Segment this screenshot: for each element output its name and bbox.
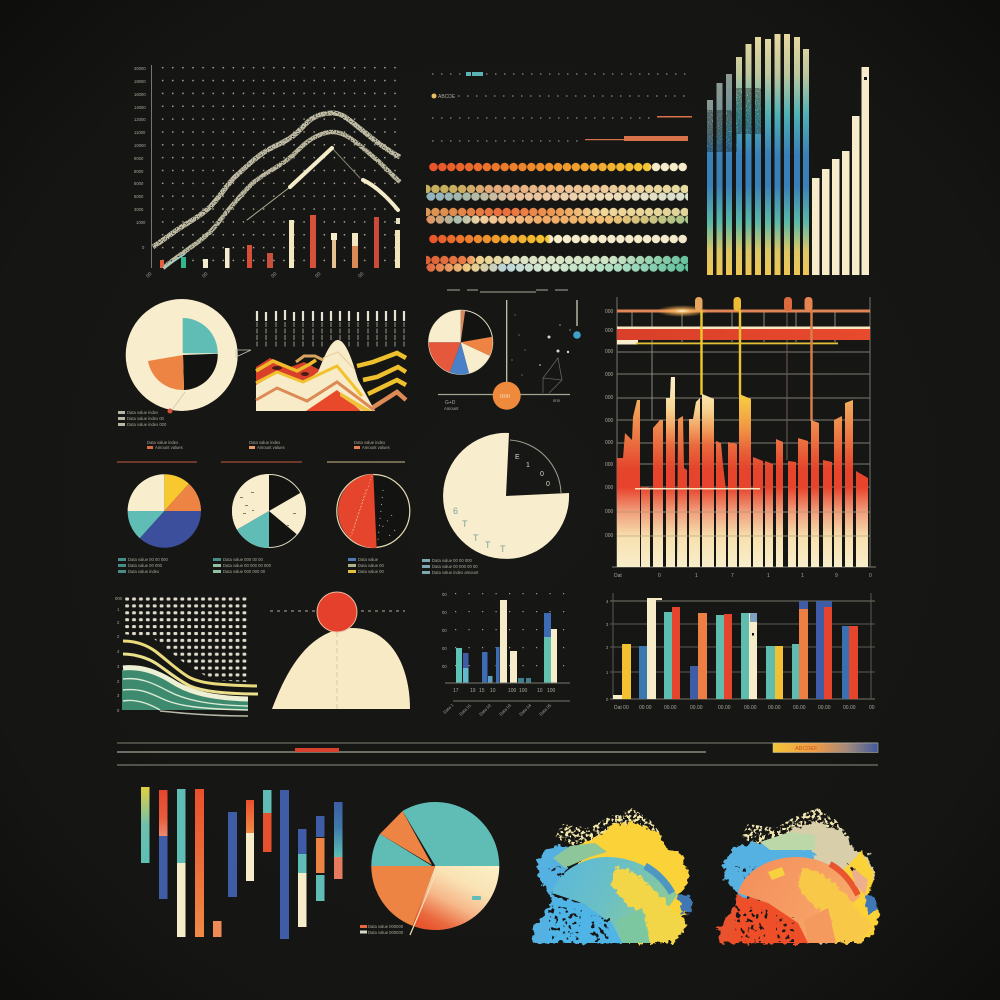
callout lines — [172, 350, 251, 410]
header rules — [117, 461, 405, 463]
x labels — [614, 705, 875, 711]
y labels: 2 — [117, 634, 120, 639]
axis captions: Amount — [444, 406, 459, 411]
y axis with labels — [134, 65, 152, 268]
y labels: 000 — [605, 349, 614, 355]
rim labels: T — [500, 544, 506, 554]
dot grid — [158, 63, 403, 268]
y labels: 4 — [606, 599, 609, 604]
legend 2: Data value 000 00 00 — [223, 557, 263, 562]
header legend 1: Amount values — [155, 445, 183, 450]
rim labels — [453, 506, 506, 554]
value labels: 100 — [519, 688, 528, 694]
yellow right edge — [830, 850, 880, 943]
value labels: 100 — [547, 688, 556, 694]
x axis labels: 00 — [145, 271, 154, 279]
notch labels: 0 — [540, 471, 544, 478]
rim labels: T — [462, 519, 468, 529]
tan silhouette — [766, 822, 878, 943]
small bars — [160, 215, 400, 268]
legend — [360, 924, 404, 935]
axis captions: G+D — [445, 400, 456, 406]
y labels: 00 — [442, 592, 447, 597]
grid lines — [612, 297, 876, 567]
cream top strip — [123, 668, 248, 699]
panel: small bar chart — [442, 590, 570, 717]
legend: Data value 000000 — [368, 924, 404, 929]
dark speckle — [546, 866, 610, 943]
rotated labels: Data 04 — [518, 702, 533, 717]
cream wave band — [123, 654, 258, 694]
cream dome — [272, 628, 410, 709]
value labels: 17 — [453, 688, 459, 694]
value labels: 100 — [508, 688, 517, 694]
bar 4 — [195, 789, 204, 937]
lever axes — [438, 300, 577, 394]
x labels: 00.00 — [843, 705, 856, 711]
orange slice — [148, 355, 184, 390]
bar 11 — [316, 816, 324, 901]
cream disc — [126, 299, 238, 411]
bright bar tops — [666, 377, 751, 450]
y labels: 000 — [605, 395, 614, 401]
notch labels: 1 — [526, 462, 530, 469]
x labels: 00.00 — [664, 705, 677, 711]
x labels: Dat — [614, 573, 622, 579]
teal tag — [472, 896, 481, 900]
legend — [118, 410, 167, 427]
y labels: 000 — [605, 309, 614, 315]
dark accents — [272, 366, 309, 376]
dot row 4 — [429, 234, 687, 244]
rotated labels: Data 03 — [498, 702, 513, 717]
bottom blue — [545, 900, 622, 943]
red marker — [295, 748, 339, 752]
y axis with labels: 16000 — [134, 92, 146, 97]
value labels — [453, 688, 556, 694]
y labels — [442, 592, 447, 669]
panel: tall gradient bars — [705, 34, 869, 275]
header legend 2 — [249, 440, 285, 450]
bright red lower — [731, 900, 808, 943]
bar 9 — [280, 790, 289, 939]
pie chart — [429, 310, 493, 374]
header legend 3: Amount values — [362, 445, 390, 450]
legend 1: Data value index — [128, 569, 160, 574]
y labels: 00 — [442, 628, 447, 633]
pie 2 — [232, 474, 306, 548]
x labels: 00 — [869, 705, 875, 711]
rotated labels — [442, 702, 553, 717]
y labels: 000 — [605, 462, 614, 468]
teal side slice — [371, 834, 432, 866]
panel: floating bars — [141, 787, 342, 939]
highlight line — [635, 488, 760, 490]
legend 1 — [118, 557, 168, 574]
y axis with labels: 6000 — [134, 181, 144, 186]
y labels: 2 — [606, 645, 609, 650]
y labels: 000 — [605, 328, 614, 334]
legend — [422, 558, 479, 575]
header legend 3 — [354, 440, 390, 450]
x axis labels: 00 — [314, 271, 323, 279]
y axis with labels: 5000 — [134, 194, 144, 199]
dot field — [125, 598, 247, 682]
bar 12 — [334, 802, 342, 879]
pale green top — [760, 832, 815, 850]
cream body — [443, 433, 569, 559]
bar 10 — [298, 829, 306, 927]
cream bars — [812, 67, 869, 275]
header legend 1 — [147, 440, 183, 450]
panel: wide grouped bar chart — [606, 593, 875, 711]
orange circle: nnn — [500, 394, 510, 400]
panel: fire bar chart — [605, 297, 876, 579]
timeline strip — [117, 743, 878, 765]
panel: big pie with notch — [422, 433, 569, 575]
cream mountain — [256, 340, 375, 411]
x labels: 0 — [658, 573, 661, 579]
x axis labels — [145, 271, 366, 279]
y labels: 00 — [442, 664, 447, 669]
y labels: 2 — [117, 679, 120, 684]
yellow inner patch — [612, 868, 687, 943]
illustration: cool blob — [533, 808, 692, 943]
dot row 1 — [429, 162, 687, 172]
legend 2: Data value 00 000 00 000 — [223, 563, 272, 568]
x labels: 00.00 — [768, 705, 781, 711]
legend 3: Data value 00 — [358, 563, 385, 568]
y axis with labels: 0 — [142, 245, 145, 250]
rim labels: T — [485, 540, 491, 550]
y axis with labels: 3000 — [134, 207, 144, 212]
rotated labels: Data 02 — [478, 702, 493, 717]
x labels: 0 — [869, 573, 872, 579]
grid — [610, 593, 875, 699]
legend: Data value index 000 — [127, 422, 167, 427]
dark speckle — [732, 862, 858, 943]
peach patch — [850, 865, 868, 895]
y axis with labels: 8000 — [134, 169, 144, 174]
yellow legend dot: ABCDE — [438, 94, 456, 100]
bars — [613, 598, 858, 699]
y labels: 0 — [117, 708, 120, 713]
dotted guide lines — [432, 74, 688, 141]
yellow foot — [340, 392, 372, 411]
y labels: 0 — [606, 697, 609, 702]
y axis with labels: 18000 — [134, 79, 146, 84]
bar 6 — [228, 812, 237, 897]
panel: three small pies — [117, 440, 410, 574]
panel: wave and dot field — [115, 596, 258, 716]
y labels: 000 — [605, 418, 614, 424]
orange large slice — [371, 866, 435, 926]
notch ring — [510, 440, 561, 493]
y axis with labels: 10000 — [134, 143, 146, 148]
panel: dome and ball — [270, 592, 410, 711]
header legend 3: Data value index — [354, 440, 386, 445]
white stripes — [123, 679, 248, 716]
bar 5 — [213, 921, 222, 937]
x labels: 00.00 — [818, 705, 831, 711]
legend: Data value index — [127, 410, 159, 415]
rim labels: T — [473, 533, 479, 543]
pie 1 — [128, 474, 201, 548]
vertical guides — [632, 311, 835, 460]
cream gradient slice — [412, 866, 499, 930]
legend: Data value 00 00 000 — [432, 558, 472, 563]
illustration: warm blob — [719, 808, 880, 943]
y labels: 3 — [117, 664, 120, 669]
x labels: 00.00 — [718, 705, 731, 711]
orange wedge — [380, 811, 432, 865]
dome rim — [645, 866, 672, 893]
dot grid — [450, 590, 570, 680]
panel: slim pie with lever — [429, 290, 581, 411]
y axis with labels: 11000 — [134, 130, 146, 135]
peach bottom — [804, 908, 836, 943]
x labels: 00.00 — [744, 705, 757, 711]
green bottom — [618, 908, 650, 943]
red ball — [317, 592, 357, 632]
red triangle — [306, 390, 361, 411]
y labels: 000 — [605, 533, 614, 539]
y axis with labels: 14000 — [134, 105, 146, 110]
y labels: 000 — [605, 440, 614, 446]
black marker — [864, 77, 867, 80]
x axis labels: 00 — [201, 271, 210, 279]
panel: multi-line trend chart — [134, 63, 403, 279]
dashed axis — [336, 632, 338, 711]
y labels: 1 — [606, 670, 609, 675]
legend 3: Data value — [358, 557, 379, 562]
blue drop — [573, 331, 581, 339]
x labels: 00.00 — [793, 705, 806, 711]
bar 2 — [159, 790, 168, 899]
pin stems — [702, 310, 812, 421]
yellow wave band — [123, 641, 257, 686]
bar 3 — [177, 789, 186, 937]
x axis labels: 00 — [270, 271, 279, 279]
y axis with labels: 1000 — [136, 220, 146, 225]
notch labels: 0 — [546, 481, 550, 488]
grey tops of first bars — [707, 74, 732, 150]
top dashes — [447, 290, 568, 292]
teal main slice — [402, 802, 499, 866]
x labels: 9 — [835, 573, 838, 579]
red rim — [830, 864, 858, 895]
sparse top specks — [741, 808, 850, 846]
x labels: 1 — [695, 573, 698, 579]
trend line lower — [247, 148, 398, 220]
y labels: 3 — [606, 622, 609, 627]
legend 1: Data value 00 00 000 — [128, 557, 168, 562]
sparse top specks — [555, 808, 664, 846]
teal slice — [183, 318, 218, 353]
y labels: 000 — [605, 485, 614, 491]
scatter — [512, 314, 571, 393]
x labels: 7 — [731, 573, 734, 579]
blue left mass — [723, 843, 818, 900]
axes — [445, 683, 570, 701]
gradient segment: ABCDEF — [795, 746, 818, 752]
orange range markers — [585, 116, 692, 141]
value labels: 19 — [470, 688, 476, 694]
right blue spot — [864, 895, 878, 914]
y axis with labels: 9000 — [134, 156, 144, 161]
bar 8 — [263, 790, 272, 852]
rotated labels: Data 05 — [538, 702, 553, 717]
notch labels — [515, 454, 550, 488]
pie 3 — [337, 474, 410, 548]
yellow highlight — [768, 867, 785, 880]
y axis with labels: 12000 — [134, 117, 146, 122]
red back layer — [256, 358, 320, 390]
yellow legend dot — [432, 94, 456, 100]
right blue spot — [678, 895, 692, 914]
orange dome — [738, 857, 860, 943]
green waves — [122, 670, 248, 710]
y labels: 1 — [117, 607, 120, 612]
y labels — [115, 596, 123, 713]
right zigzags — [357, 353, 406, 408]
trend line upper — [153, 113, 400, 247]
top orange rail — [617, 310, 870, 312]
y labels: 2 — [117, 620, 120, 625]
legend: Data value 000000 — [368, 930, 404, 935]
y labels: 4 — [117, 649, 120, 654]
yellow inner patch — [798, 868, 873, 943]
legend 2: Data value 000 000 00 — [223, 569, 266, 574]
bars — [456, 600, 557, 683]
top tick marks — [257, 310, 404, 348]
y labels: 000 — [605, 372, 614, 378]
y labels: 00 — [442, 646, 447, 651]
x labels: 00.00 — [690, 705, 703, 711]
orange circle — [493, 382, 521, 410]
dome — [552, 857, 677, 943]
faint grid over bars — [617, 512, 870, 536]
panel: layered area chart — [256, 310, 406, 411]
glow — [656, 305, 708, 317]
panel: bottom pie — [360, 802, 499, 935]
y labels: 00 — [442, 610, 447, 615]
green patch — [553, 843, 607, 868]
header legend 1: Data value index — [147, 440, 179, 445]
x axis labels: 00 — [357, 271, 366, 279]
x labels: 1 — [767, 573, 770, 579]
red lower mass — [719, 895, 820, 943]
bar 1 — [141, 787, 150, 863]
dot row 5 — [426, 255, 688, 273]
black slice — [183, 354, 218, 390]
legend 3: Data value 00 — [358, 569, 385, 574]
red band — [617, 326, 870, 344]
blue left mass — [533, 845, 622, 943]
legend: Data value 00 000 00 00 — [432, 564, 478, 569]
noise overlay — [705, 88, 764, 152]
value labels: 10 — [537, 688, 543, 694]
red marker — [168, 408, 172, 414]
y labels: 3 — [117, 693, 120, 698]
gradient bars — [707, 34, 809, 275]
notch labels: E — [515, 454, 520, 461]
panel: dot rows — [426, 72, 692, 273]
dot row 3 — [426, 207, 688, 225]
value labels: 15 — [479, 688, 485, 694]
bars — [617, 377, 868, 567]
header legend 2: Amount values — [257, 445, 285, 450]
y labels — [606, 599, 609, 702]
yellow silhouette — [580, 822, 692, 943]
axis captions — [444, 398, 561, 411]
legend: Data value index amount — [432, 570, 479, 575]
dashed rule — [270, 610, 405, 612]
layer stripes — [256, 352, 374, 410]
x labels — [614, 573, 872, 579]
timeline rules — [117, 743, 878, 765]
y labels: 000 — [605, 509, 614, 515]
pin caps — [695, 297, 812, 311]
panel: large cream pie — [118, 299, 251, 427]
pointer line — [410, 868, 438, 935]
x labels: Dat 00 — [614, 705, 629, 711]
gradient segment — [773, 743, 878, 752]
axis captions: nnn — [553, 398, 561, 403]
teal marker — [466, 72, 483, 76]
legend 3 — [348, 557, 385, 574]
y labels — [605, 309, 614, 539]
rim labels: 6 — [453, 506, 458, 516]
trend line middle — [163, 132, 400, 268]
x labels: 1 — [801, 573, 804, 579]
legend: Data value index 00 — [127, 416, 165, 421]
header legend 2: Data value index — [249, 440, 281, 445]
dot row 2 — [426, 184, 688, 202]
rotated labels: Data 01 — [458, 702, 473, 717]
legend 2 — [213, 557, 272, 574]
y labels: 000 — [115, 596, 123, 601]
rotated labels: Data 1 — [442, 702, 455, 715]
value labels: 10 — [490, 688, 496, 694]
legend 1: Data value 00 000 — [128, 563, 163, 568]
x labels: 00 00 — [639, 705, 652, 711]
bar 7 — [246, 800, 254, 881]
y axis with labels: 20000 — [134, 66, 146, 71]
